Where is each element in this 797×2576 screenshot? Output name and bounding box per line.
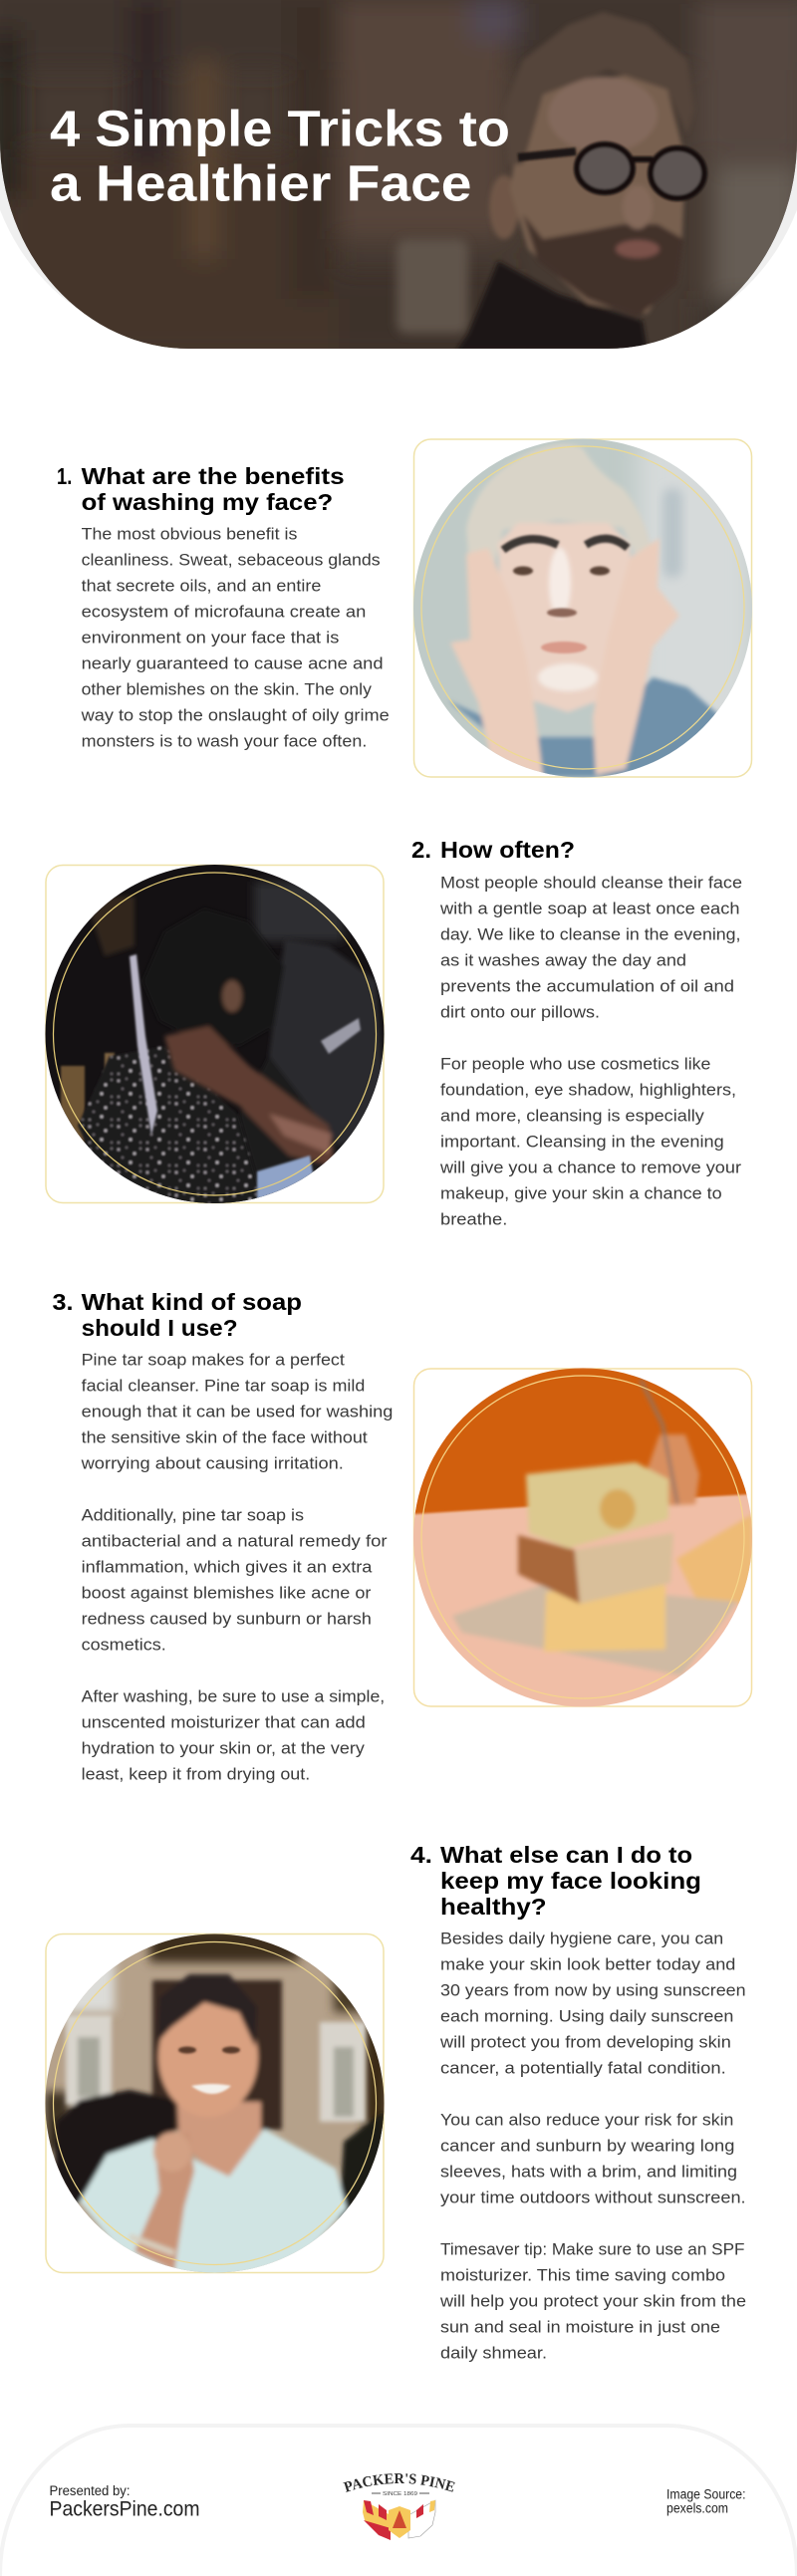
text block: section 4: moisturizer. This time saving combo <box>440 2265 725 2284</box>
title: a Healthier Face <box>50 155 472 212</box>
hair <box>157 1974 257 2047</box>
panel: section 4 other care <box>45 1842 746 2362</box>
text block: section 2: breathe. <box>440 1209 507 1228</box>
image source: Image Source: <box>666 2486 745 2502</box>
logo: Packer's Pine: PACKER'S PINE <box>343 2473 455 2492</box>
text block: section 3: worrying about causing irritation. <box>81 1454 344 1473</box>
badge <box>321 1018 361 1054</box>
eyebrows <box>503 539 558 550</box>
man portrait <box>456 12 694 351</box>
text block: section 4: You can also reduce your risk for skin <box>440 2110 733 2129</box>
sponge <box>676 1514 752 1604</box>
blurred street background <box>0 0 797 359</box>
heading: section 4: keep my face looking <box>440 1868 701 1894</box>
text block: section 3: facial cleanser. Pine tar soap is mild <box>82 1377 365 1396</box>
photo: smiling man in white t-shirt <box>45 1928 389 2281</box>
t-shirt <box>80 2129 347 2281</box>
hair <box>503 12 694 164</box>
text block: section 3 <box>81 1351 393 1784</box>
text block: section 4: daily shmear. <box>440 2343 547 2362</box>
logo: Packer's Pine: SINCE 1869 <box>383 2491 417 2497</box>
text block: section 2: dirt onto our pillows. <box>440 1002 600 1021</box>
shirt <box>269 939 387 1146</box>
glasses <box>518 144 704 198</box>
text block: section 4: your time outdoors without sunscreen. <box>440 2188 746 2206</box>
text block: section 1: The most obvious benefit is <box>82 525 297 544</box>
image source: pexels.com <box>666 2500 728 2516</box>
ear <box>222 980 242 1012</box>
text block: section 2: foundation, eye shadow, highlighters, <box>440 1080 736 1099</box>
water stream <box>130 954 157 1136</box>
text block: section 4: cancer, a potentially fatal condition. <box>440 2058 726 2077</box>
photo: man splashing water <box>45 865 387 1204</box>
text block: section 1: way to stop the onslaught of oily grime <box>81 706 390 725</box>
heading: section 4: 4. <box>410 1842 432 1868</box>
forehead <box>548 77 658 152</box>
panel: header photo banner <box>0 0 797 359</box>
photo: man washing face with foam <box>413 438 752 777</box>
logo: Packer's Pine <box>343 2473 455 2540</box>
heading: section 4: healthy? <box>440 1894 547 1920</box>
heading: section 3: should I use? <box>82 1315 238 1341</box>
heading: section 2: 2. <box>411 837 431 863</box>
left hand <box>450 548 543 777</box>
image source <box>666 2486 745 2516</box>
text block: section 3: least, keep it from drying out. <box>82 1765 310 1784</box>
text block: section 4: Besides daily hygiene care, you can <box>440 1929 723 1947</box>
eyes and smile <box>178 2046 196 2054</box>
text block: section 4: sun and seal in moisture in just one <box>440 2317 720 2336</box>
text block: section 2: will give you a chance to remove your <box>439 1158 741 1176</box>
presented by: PackersPine.com <box>50 2498 199 2520</box>
text block: section 3: redness caused by sunburn or harsh <box>82 1610 372 1629</box>
heading: section 3 <box>52 1289 302 1341</box>
cloth <box>452 1584 737 1675</box>
text block: section 1: cleanliness. Sweat, sebaceous glands <box>82 551 381 570</box>
text block: section 2: and more, cleansing is especially <box>440 1106 704 1125</box>
text block: section 3: cosmetics. <box>82 1636 166 1655</box>
text block: section 3: After washing, be sure to use a simple, <box>82 1687 385 1706</box>
presented by: Presented by: <box>50 2483 130 2498</box>
photo: stacked soap bars <box>413 1368 752 1707</box>
text block: section 1: other blemishes on the skin. The only <box>82 680 372 699</box>
text block: section 3: Pine tar soap makes for a perfect <box>82 1351 345 1370</box>
text block: section 2: Most people should cleanse their face <box>440 873 742 892</box>
text block: section 1: ecosystem of microfauna create an <box>82 603 366 622</box>
heading: section 3: 3. <box>52 1289 74 1315</box>
text block: section 4: make your skin look better today and <box>440 1954 735 1973</box>
text block: section 2: as it washes away the day and <box>440 950 686 969</box>
lips <box>541 642 587 653</box>
foam <box>549 548 571 618</box>
neck and turtleneck <box>456 261 648 351</box>
text block: section 3: unscented moisturizer that can add <box>82 1713 366 1732</box>
beard <box>523 214 683 317</box>
bottom soap <box>544 1585 665 1652</box>
glass bottle <box>646 1434 699 1506</box>
head and hair <box>176 924 283 1046</box>
text block: section 3: inflammation, which gives it an extra <box>82 1558 373 1577</box>
text block: section 1: nearly guaranteed to cause acne and <box>82 654 384 673</box>
heading: section 1: of washing my face? <box>82 489 333 515</box>
heading: section 2: How often? <box>440 837 575 863</box>
face <box>158 1997 258 2117</box>
text block: section 4: Timesaver tip: Make sure to use an SPF <box>440 2239 745 2258</box>
arm and hand <box>164 1026 334 1165</box>
face <box>498 523 633 712</box>
middle soap <box>518 1535 580 1604</box>
lips <box>616 240 660 258</box>
text block: section 4: sleeves, hats with a brim, and limiting <box>440 2162 737 2181</box>
text block: section 3: boost against blemishes like acne or <box>82 1584 372 1603</box>
panel: section 1 benefits <box>57 438 752 777</box>
top soap <box>526 1462 668 1548</box>
heading: section 4 <box>410 1842 701 1920</box>
text block: section 2: with a gentle soap at least once each <box>439 899 739 917</box>
text block: section 1: that secrete oils, and an entire <box>82 577 321 596</box>
neck <box>177 2102 261 2182</box>
nose <box>547 608 577 618</box>
heading: section 4: What else can I do to <box>440 1842 692 1868</box>
dark jacket <box>55 2090 174 2206</box>
text block: section 2: For people who use cosmetics like <box>440 1054 710 1073</box>
text block: section 3: antibacterial and a natural remedy for <box>82 1532 388 1551</box>
title <box>50 101 510 212</box>
text block: section 3: Additionally, pine tar soap is <box>82 1506 304 1525</box>
text block: section 3: enough that it can be used for washing <box>82 1403 393 1421</box>
text block: section 2 <box>439 873 742 1228</box>
door <box>152 1980 282 2130</box>
panel: section 2 how often <box>45 837 742 1228</box>
text block: section 1: monsters is to wash your face often. <box>82 732 367 751</box>
window columns <box>66 2015 112 2105</box>
arm <box>134 2132 194 2271</box>
panel: section 3 soap <box>52 1289 752 1784</box>
text block: section 1: environment on your face that is <box>82 629 339 647</box>
text block: section 4: 30 years from now by using sunscreen <box>440 1980 746 1999</box>
nose <box>623 185 653 229</box>
panel: footer <box>0 2424 797 2576</box>
text block: section 1 <box>81 525 390 751</box>
text block: section 3: the sensitive skin of the face without <box>82 1428 368 1447</box>
text block: section 2: important. Cleansing in the evening <box>440 1132 724 1151</box>
text block: section 4: each morning. Using daily sunscreen <box>440 2006 733 2025</box>
heading: section 1: What are the benefits <box>82 463 345 489</box>
face <box>510 70 685 314</box>
text block: section 2: makeup, give your skin a chance to <box>440 1183 722 1202</box>
right hand <box>593 538 679 775</box>
text block: section 4 <box>439 1929 746 2362</box>
hair <box>466 444 653 578</box>
ear <box>489 175 519 239</box>
heading: section 3: What kind of soap <box>82 1289 302 1315</box>
text block: section 3: hydration to your skin or, at the very <box>82 1739 365 1758</box>
title: 4 Simple Tricks to <box>50 101 510 157</box>
heading: section 1 <box>57 463 345 515</box>
text block: section 2: prevents the accumulation of oil and <box>440 976 734 995</box>
shirt <box>447 677 727 777</box>
text block: section 4: will help you protect your skin from the <box>439 2291 746 2310</box>
eyes <box>513 566 533 576</box>
header halo <box>0 0 797 344</box>
text block: section 2: day. We like to cleanse in the evening, <box>440 924 741 943</box>
text block: section 4: cancer and sunburn by wearing long <box>440 2136 734 2155</box>
heading: section 1: 1. <box>57 463 72 489</box>
text block: section 4: will protect you from developing skin <box>439 2032 731 2051</box>
bracelet <box>130 2236 174 2253</box>
presented by <box>50 2483 199 2520</box>
